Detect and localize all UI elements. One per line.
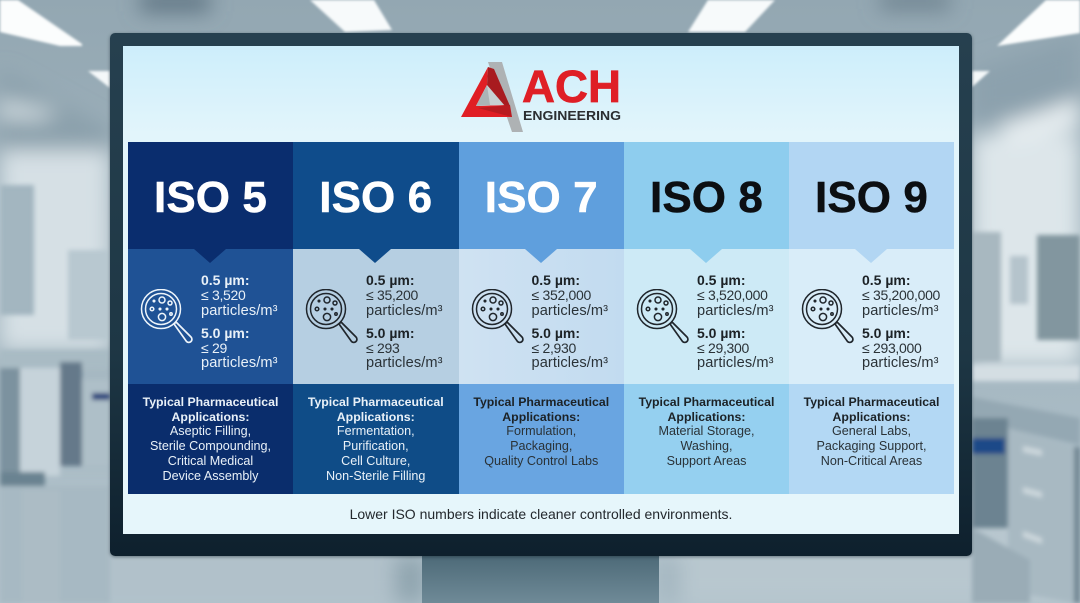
ISO 5 applications: Sterile Compounding, — [150, 439, 271, 453]
ISO 7 particle limits — [458, 249, 624, 384]
ISO 8 applications: Applications: — [668, 410, 745, 424]
logo: ACH Engineering — [461, 61, 621, 132]
ISO 6 limits text: ≤ 293 — [366, 340, 399, 356]
ISO 7 limits text: 0.5 µm: — [532, 272, 580, 288]
ISO 5 applications — [128, 384, 293, 494]
ISO 8 particle limits — [624, 249, 789, 384]
ISO 9 heading block — [789, 142, 954, 249]
ISO 9 applications: Typical Pharmaceutical — [804, 395, 939, 409]
ISO 8 heading block: ISO 8 — [650, 173, 763, 222]
logo subtitle: ENGINEERING — [523, 108, 621, 123]
ISO 9 limits text: particles/m³ — [862, 355, 939, 371]
footer note: Lower ISO numbers indicate cleaner controlled environments. — [350, 506, 732, 522]
ISO 9 particle limits — [789, 249, 954, 384]
logo wordmark: ACH — [522, 61, 621, 112]
ISO 9 limits text: 0.5 µm: — [862, 272, 911, 288]
ISO 7 limits text: ≤ 2,930 — [532, 340, 576, 356]
ISO 5 applications: Device Assembly — [163, 469, 258, 483]
ISO 6 limits text — [366, 272, 443, 371]
ISO 9 limits text: particles/m³ — [862, 303, 939, 319]
ISO 6 applications: Purification, — [343, 439, 409, 453]
ISO 7 applications — [458, 384, 624, 494]
ISO 8 applications: Washing, — [680, 439, 733, 453]
ISO 5 applications: Critical Medical — [168, 454, 253, 468]
ISO 7 applications: Quality Control Labs — [484, 454, 598, 468]
ISO 5 applications: Typical Pharmaceutical — [143, 395, 278, 409]
ISO 6 applications — [293, 384, 458, 494]
icon: magnifier — [802, 289, 854, 344]
column: ISO 7 — [459, 142, 624, 494]
ISO 6 limits text: particles/m³ — [366, 355, 443, 371]
ISO 6 limits text: particles/m³ — [366, 303, 443, 319]
column: ISO 6 — [293, 142, 459, 494]
ISO 7 limits text: ≤ 352,000 — [532, 287, 591, 303]
ISO 8 limits text: ≤ 29,300 — [697, 340, 749, 356]
ISO 6 applications: Fermentation, — [337, 424, 415, 438]
ISO 9 limits text: ≤ 293,000 — [862, 340, 921, 356]
ISO 9 applications: Packaging Support, — [817, 439, 926, 453]
ISO 8 limits text: particles/m³ — [697, 355, 774, 371]
ISO 5 limits text: ≤ 29 — [201, 340, 227, 356]
ISO 7 limits text: 5.0 µm: — [532, 325, 580, 341]
ISO 6 limits text: 0.5 µm: — [366, 272, 415, 288]
column: ISO 8 — [624, 142, 789, 494]
ISO 7 applications: Applications: — [502, 410, 580, 424]
ISO 8 applications — [624, 384, 789, 494]
ISO 6 limits text: ≤ 35,200 — [366, 287, 418, 303]
ISO 6 heading block: ISO 6 — [319, 173, 432, 222]
ISO 5 heading block — [128, 142, 293, 249]
ISO 8 limits text: particles/m³ — [697, 303, 774, 319]
ISO 9 limits text: 5.0 µm: — [862, 325, 911, 341]
icon: magnifier — [306, 289, 358, 344]
ISO 8 limits text: ≤ 3,520,000 — [697, 287, 768, 303]
ISO 7 heading block — [458, 142, 624, 249]
ISO 5 limits text: 5.0 µm: — [201, 325, 250, 341]
column: ISO 9 — [789, 142, 954, 494]
ISO 6 particle limits — [293, 249, 458, 384]
screen — [123, 46, 959, 534]
ISO 7 heading block: ISO 7 — [485, 173, 598, 222]
ISO 6 applications: Non-Sterile Filling — [326, 469, 425, 483]
icon: magnifier — [636, 289, 689, 344]
ISO 9 heading block: ISO 9 — [815, 173, 928, 222]
ISO 8 limits text: 5.0 µm: — [697, 325, 746, 341]
ISO 8 heading block — [624, 142, 789, 249]
ISO 7 applications: Formulation, — [506, 424, 576, 438]
monitor stand — [422, 556, 659, 603]
ISO 5 limits text — [201, 272, 278, 371]
ISO 5 applications: Applications: — [172, 410, 249, 424]
ISO 7 limits text: particles/m³ — [532, 355, 608, 371]
ISO 9 applications — [789, 384, 954, 494]
icon: magnifier — [140, 289, 193, 344]
ISO 8 limits text — [697, 272, 774, 371]
ISO 8 applications: Material Storage, — [659, 424, 754, 438]
ISO 6 applications: Cell Culture, — [341, 454, 410, 468]
ISO 5 particle limits — [128, 249, 293, 384]
ISO 6 applications: Applications: — [337, 410, 415, 424]
ISO 8 limits text: 0.5 µm: — [697, 272, 746, 288]
ISO 8 applications: Typical Pharmaceutical — [639, 395, 774, 409]
ISO 5 applications: Aseptic Filling, — [170, 424, 251, 438]
ISO 9 applications: General Labs, — [832, 424, 911, 438]
ISO 5 limits text: particles/m³ — [201, 355, 278, 371]
ISO 7 limits text — [532, 272, 608, 371]
ISO 9 applications: Non-Critical Areas — [821, 454, 922, 468]
ISO 5 heading block: ISO 5 — [154, 173, 267, 222]
monitor frame — [110, 33, 972, 556]
ISO 9 applications: Applications: — [833, 410, 910, 424]
ISO 6 limits text: 5.0 µm: — [366, 325, 415, 341]
ISO 5 limits text: particles/m³ — [201, 303, 278, 319]
ISO 7 applications: Typical Pharmaceutical — [473, 395, 609, 409]
ISO 9 limits text — [862, 272, 940, 371]
ISO 5 limits text: ≤ 3,520 — [201, 287, 246, 303]
ISO 9 limits text: ≤ 35,200,000 — [862, 287, 940, 303]
ISO 6 applications: Typical Pharmaceutical — [308, 395, 444, 409]
ISO 6 heading block — [293, 142, 458, 249]
ISO 7 applications: Packaging, — [510, 439, 572, 453]
icon: magnifier — [472, 289, 524, 344]
ISO 5 limits text: 0.5 µm: — [201, 272, 250, 288]
column: ISO 5 — [128, 142, 293, 494]
ISO 8 applications: Support Areas — [667, 454, 746, 468]
ISO 7 limits text: particles/m³ — [532, 303, 608, 319]
